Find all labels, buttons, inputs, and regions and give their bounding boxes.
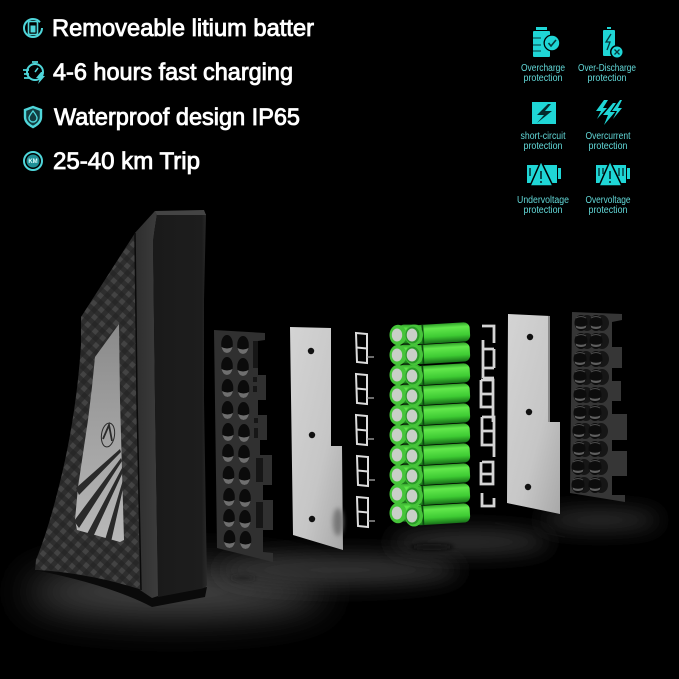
holder holes — [572, 315, 609, 493]
over-discharge protection — [578, 27, 636, 84]
heading list — [23, 15, 314, 175]
over-discharge protection: Over-Discharge — [578, 63, 636, 74]
overcharge protection: protection — [524, 73, 562, 84]
short-circuit protection: protection — [524, 141, 562, 152]
undervoltage protection — [517, 161, 569, 216]
front row cells — [405, 322, 470, 526]
over-discharge protection: protection — [588, 73, 626, 84]
holder body — [570, 312, 627, 502]
overvoltage protection: protection — [588, 205, 628, 216]
short-circuit protection: short-circuit — [520, 131, 566, 142]
right cell holder — [570, 312, 627, 502]
overvoltage protection — [586, 161, 631, 216]
feature: trip range: KM — [28, 159, 38, 165]
overcharge protection: Overcharge — [521, 63, 565, 74]
sunburst stripes — [74, 449, 124, 542]
overcurrent protection: protection — [588, 141, 628, 152]
holder holes — [221, 335, 251, 549]
case top edge — [155, 210, 206, 215]
underside shadow — [35, 570, 207, 607]
feature: removable battery: Removeable litium batter — [52, 15, 314, 42]
holder body — [214, 330, 273, 562]
case front face — [153, 214, 207, 597]
feature: fast charging: 4-6 hours fast charging — [53, 59, 293, 86]
floor glow — [25, 512, 660, 616]
back row cells — [390, 325, 422, 523]
overvoltage protection: Overvoltage — [586, 195, 631, 206]
protection icon grid — [517, 27, 636, 216]
left metal plate — [290, 327, 343, 550]
nickel strips left — [356, 333, 375, 527]
undervoltage protection: Undervoltage — [517, 195, 569, 206]
feature: trip range: 25-40 km Trip — [53, 148, 200, 175]
right metal plate — [507, 314, 560, 514]
logo badge — [100, 422, 116, 448]
carbon fibre side panel — [35, 211, 155, 592]
case side strip — [135, 211, 158, 598]
battery case — [35, 210, 207, 607]
short-circuit protection — [520, 102, 566, 152]
left cell holder — [214, 330, 273, 562]
silver label plate — [75, 324, 124, 542]
case divider seam — [135, 233, 141, 590]
overcurrent protection: Overcurrent — [586, 131, 631, 142]
overcurrent protection — [586, 100, 631, 152]
green lithium cells — [390, 322, 470, 526]
holder slots — [253, 341, 263, 528]
nickel strips right — [481, 326, 494, 506]
undervoltage protection: protection — [524, 205, 562, 216]
overcharge protection — [521, 27, 565, 84]
feature: waterproof: Waterproof design IP65 — [54, 104, 300, 131]
